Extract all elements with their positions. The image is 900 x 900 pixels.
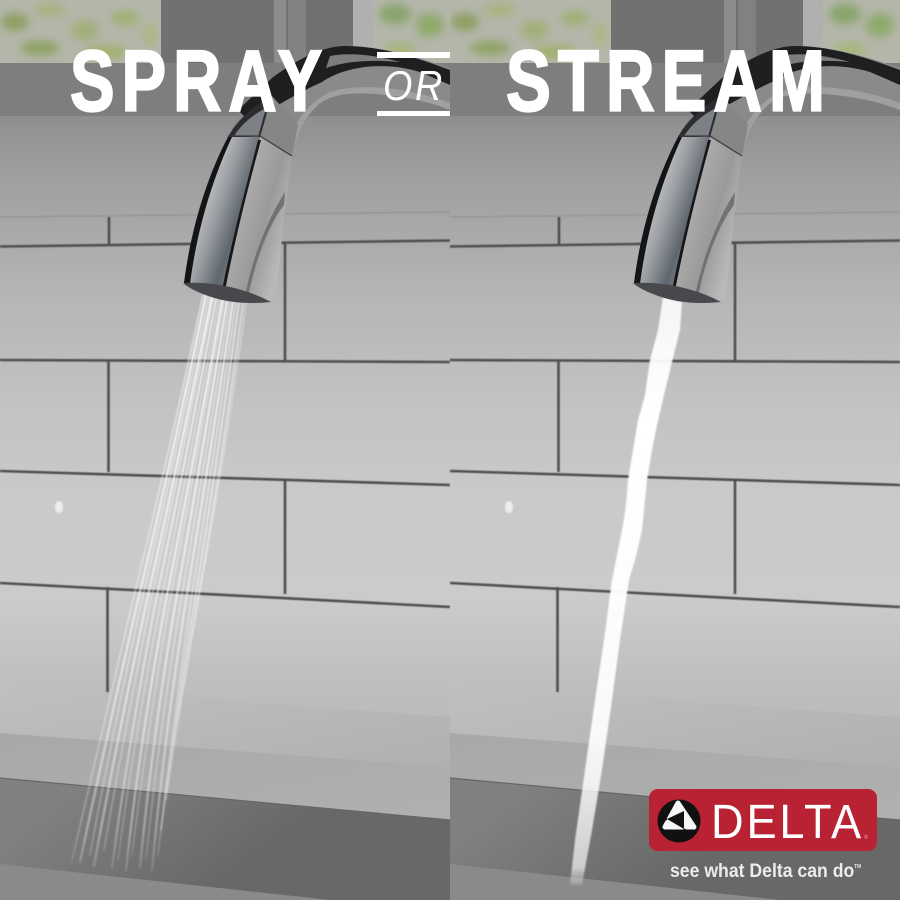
faucet upper collar bbox=[678, 96, 720, 137]
tile reflection bbox=[505, 501, 513, 513]
neck silver sweep bbox=[736, 87, 900, 156]
countertop layers bbox=[0, 683, 450, 900]
neck highlight bbox=[776, 54, 850, 68]
registered mark: ® bbox=[864, 834, 868, 841]
faucet head left shell bbox=[184, 137, 260, 290]
heading: SPRAY: SPRAY bbox=[70, 34, 329, 130]
faucet neck bbox=[678, 46, 900, 156]
faucet upper collar bbox=[228, 96, 270, 137]
faucet neck bbox=[228, 46, 450, 156]
window with foliage bbox=[450, 0, 900, 116]
faucet head right shell bbox=[225, 137, 292, 302]
countertop layers bbox=[450, 683, 900, 900]
panel: stream background kitchen wall bbox=[450, 0, 900, 900]
faucet head right shell bbox=[675, 137, 742, 302]
nozzle face with holes bbox=[183, 283, 271, 303]
logo: Delta badge bbox=[649, 789, 877, 851]
tile grout lines bbox=[0, 212, 450, 692]
neck silver sweep bbox=[286, 87, 450, 156]
heading: OR with rules bbox=[377, 52, 450, 116]
faucet: spray panel bbox=[183, 46, 450, 303]
tagline: see what Delta can do bbox=[670, 861, 868, 882]
faucet: stream panel bbox=[633, 46, 900, 303]
spray water jets bbox=[72, 295, 247, 870]
neck highlight bbox=[326, 54, 400, 68]
wordmark DELTA: DELTA bbox=[711, 796, 864, 849]
stream of water bbox=[570, 297, 682, 885]
faucet head left shell bbox=[634, 137, 710, 290]
tile reflection bbox=[55, 501, 63, 513]
nozzle face with holes bbox=[633, 283, 721, 303]
panel: spray background kitchen wall bbox=[0, 0, 450, 900]
tile grout lines bbox=[450, 212, 900, 692]
neck black band bbox=[688, 46, 900, 122]
heading: OR with rules: OR bbox=[383, 62, 445, 109]
tagline: TM bbox=[854, 864, 861, 870]
icon: Delta tri-drop mark bbox=[658, 800, 700, 842]
window with foliage bbox=[0, 0, 450, 116]
neck black band bbox=[238, 46, 450, 122]
